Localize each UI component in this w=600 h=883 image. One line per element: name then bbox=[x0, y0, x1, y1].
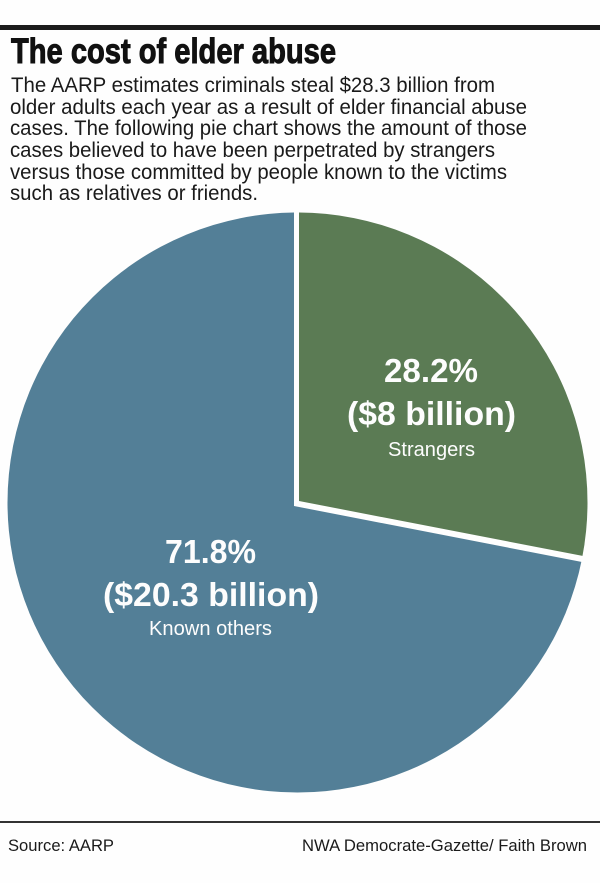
pie chart bbox=[8, 212, 588, 792]
title: The cost of elder abuse bbox=[11, 31, 336, 71]
intro text: older adults each year as a result of elder financial abuse bbox=[10, 95, 527, 119]
intro text: cases believed to have been perpetrated by strangers bbox=[10, 138, 495, 162]
slice: strangers bbox=[299, 212, 588, 556]
slice: known others bbox=[8, 212, 588, 792]
label: strangers: ($8 billion) bbox=[347, 396, 516, 433]
label: strangers: 28.2% bbox=[384, 353, 478, 390]
label: known others: 71.8% bbox=[165, 534, 256, 571]
source: Source: AARP bbox=[8, 836, 114, 855]
label: known others: ($20.3 billion) bbox=[103, 577, 319, 614]
intro text: cases. The following pie chart shows the amount of those bbox=[10, 116, 527, 140]
label: known others: Known others bbox=[149, 617, 272, 640]
intro text: such as relatives or friends. bbox=[10, 181, 258, 205]
label: strangers: Strangers bbox=[388, 438, 475, 461]
intro text: versus those committed by people known to the victims bbox=[10, 160, 507, 184]
label: known others bbox=[103, 534, 319, 640]
credit: NWA Democrate-Gazette/ Faith Brown bbox=[302, 836, 587, 855]
intro text: The AARP estimates criminals steal $28.3 billion from bbox=[11, 73, 495, 97]
label: strangers bbox=[347, 353, 516, 461]
intro text bbox=[10, 73, 527, 205]
